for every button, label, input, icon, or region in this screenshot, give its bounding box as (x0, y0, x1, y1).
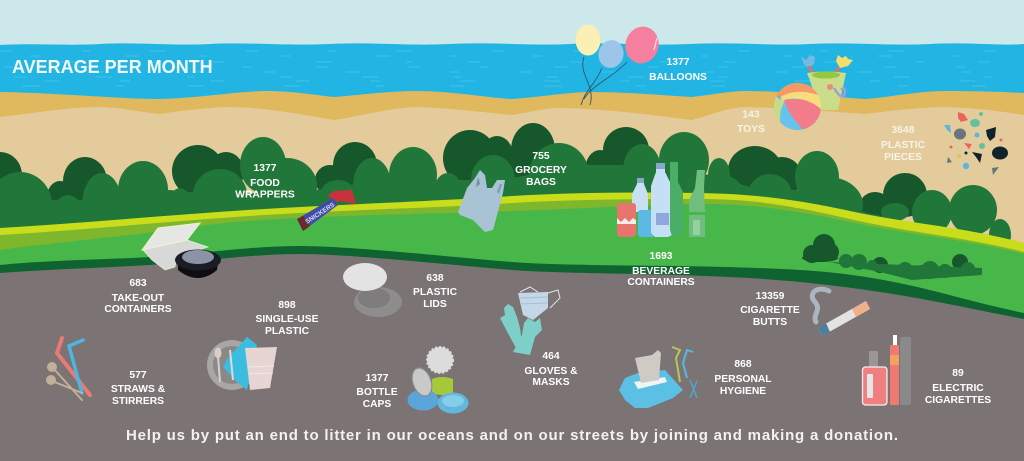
label: balloons: 1377 (667, 57, 690, 68)
label: grocery bags (515, 151, 567, 188)
label: plastic pieces: 3648 (892, 125, 915, 136)
icon: single-use plastic (207, 337, 277, 390)
label: gloves and masks: 464 (542, 351, 560, 362)
icon: grocery bag (458, 170, 505, 232)
label: bottle caps (356, 373, 398, 410)
label: personal hygiene: 868 (734, 359, 752, 370)
label: plastic lids: PLASTIC (413, 287, 458, 298)
hill: green grass (0, 204, 1024, 340)
hill: olive band (0, 199, 1024, 340)
label: take-out containers: 683 (129, 278, 147, 289)
label: balloons: BALLOONS (649, 72, 707, 83)
label: beverage containers: 1693 (650, 251, 673, 262)
sky (0, 0, 1024, 50)
label: plastic pieces (881, 125, 926, 163)
label: beverage containers: CONTAINERS (627, 277, 695, 288)
label: beverage containers: BEVERAGE (632, 266, 690, 277)
icon: gloves and masks (500, 287, 560, 355)
mid-green trees (0, 132, 1011, 260)
label: personal hygiene: PERSONAL (714, 374, 772, 385)
label: bottle caps: 1377 (366, 373, 389, 384)
icon: candy bar wrapper (297, 190, 356, 231)
road edge (0, 246, 1024, 461)
icon: plastic pieces (944, 112, 1008, 175)
label: plastic lids (413, 273, 458, 310)
label: cigarette butts: 13359 (756, 291, 785, 302)
sea (0, 43, 1024, 110)
label: food wrappers: 1377 (254, 163, 277, 174)
label: toys: TOYS (737, 124, 765, 135)
label: toys (737, 110, 765, 135)
label: take-out containers (104, 278, 172, 315)
icon: bucket toys (801, 55, 853, 110)
dark trees (0, 123, 927, 218)
label: take-out containers: TAKE-OUT (112, 293, 165, 304)
label: single-use plastic: SINGLE-USE (256, 314, 319, 325)
label: straws and stirrers: STIRRERS (112, 396, 164, 407)
label: food wrappers: FOOD (250, 178, 280, 189)
icon: bottle caps (408, 347, 468, 414)
label: grocery bags: 755 (532, 151, 550, 162)
label: electric cigarettes (925, 368, 991, 406)
label: gloves and masks (524, 351, 578, 388)
label: plastic pieces: PIECES (884, 152, 922, 163)
icon: beverage containers (617, 162, 705, 237)
bushes on hill (802, 234, 982, 280)
label: balloons (649, 57, 707, 83)
label: electric cigarettes: ELECTRIC (932, 383, 984, 394)
road (0, 254, 1024, 461)
icon: take-out containers (142, 223, 221, 278)
icon: beach ball (774, 83, 821, 130)
icon: cigarette with smoke (812, 289, 870, 336)
label: food wrappers: WRAPPERS (235, 190, 295, 200)
label: straws and stirrers: 577 (129, 370, 147, 381)
icon: straws and stirrers (46, 338, 90, 400)
label: personal hygiene: HYGIENE (720, 386, 766, 397)
label: take-out containers: CONTAINERS (104, 304, 172, 315)
heading: AVERAGE PER MONTH (12, 57, 213, 77)
call to action: Help us by put an end to litter in our oceans and on our streets by joining and making a donation. (126, 427, 898, 444)
label: single-use plastic (256, 300, 319, 337)
label: electric cigarettes: CIGARETTES (925, 395, 991, 406)
label: plastic pieces: PLASTIC (881, 140, 926, 151)
label: plastic lids: LIDS (423, 299, 447, 310)
wet sand (0, 91, 1024, 140)
label: food wrappers (235, 163, 295, 200)
icon: candy bar wrapper: SNICKERS (304, 201, 337, 226)
icon: electric cigarettes (862, 335, 911, 405)
dry sand (0, 107, 1024, 300)
icon: personal hygiene (619, 347, 697, 408)
label: beverage containers (627, 251, 695, 288)
label: single-use plastic: PLASTIC (265, 326, 310, 337)
label: bottle caps: BOTTLE (356, 387, 398, 398)
label: cigarette butts: CIGARETTE (740, 305, 800, 316)
label: straws and stirrers: STRAWS & (111, 384, 166, 395)
label: grocery bags: BAGS (526, 177, 556, 188)
label: straws and stirrers (111, 370, 166, 407)
label: gloves and masks: GLOVES & (524, 366, 578, 377)
icon: balloons (576, 23, 663, 105)
label: cigarette butts: BUTTS (753, 317, 787, 328)
label: personal hygiene (714, 359, 772, 397)
label: grocery bags: GROCERY (515, 165, 567, 176)
tree line (0, 123, 1011, 260)
icon: plastic lids (343, 263, 402, 317)
label: cigarette butts (740, 291, 800, 328)
label: electric cigarettes: 89 (952, 368, 964, 379)
label: gloves and masks: MASKS (532, 377, 570, 388)
label: single-use plastic: 898 (278, 300, 296, 311)
label: bottle caps: CAPS (363, 399, 391, 410)
label: toys: 143 (742, 110, 760, 120)
label: plastic lids: 638 (426, 273, 444, 284)
hill: yellow edge (0, 192, 1024, 340)
